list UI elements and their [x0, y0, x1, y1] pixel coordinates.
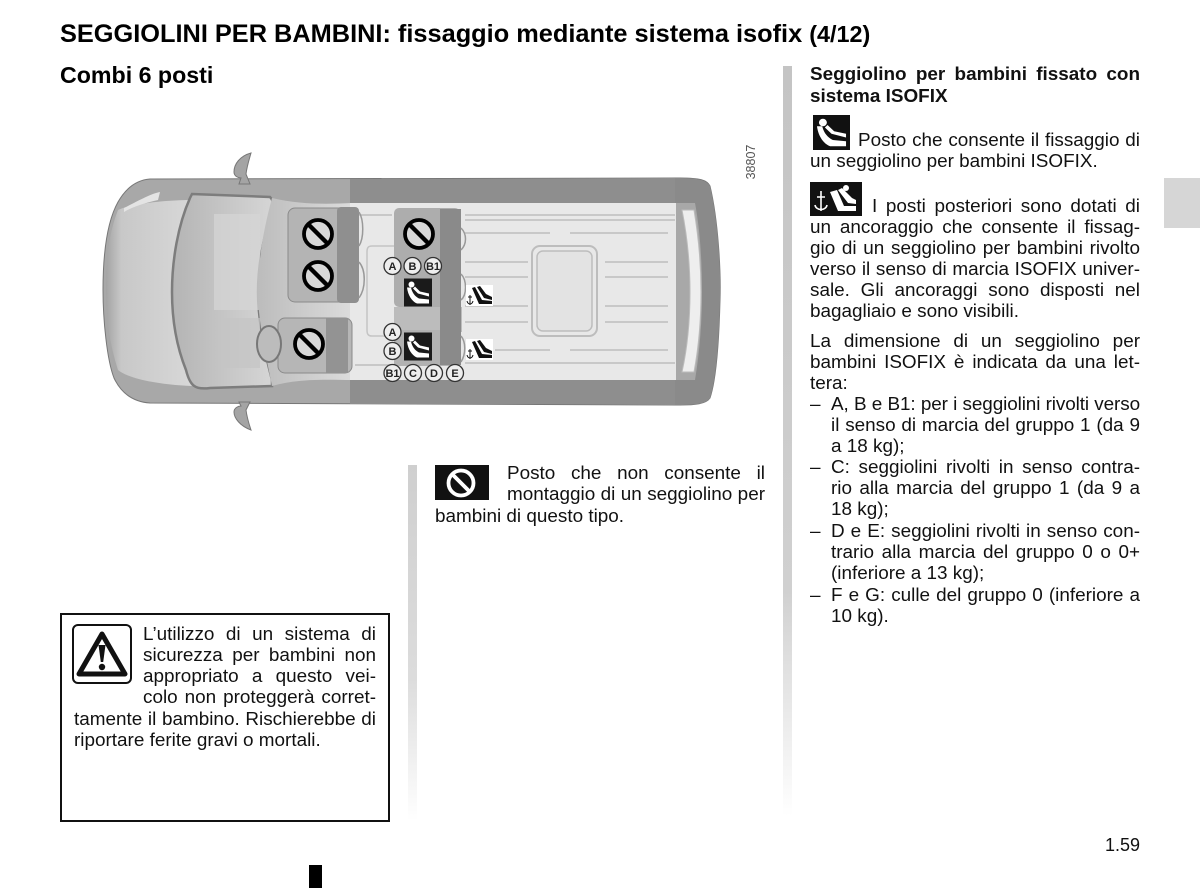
warning text: riportare ferite gravi o mortali. — [74, 730, 321, 751]
anchor icon lower — [466, 339, 493, 360]
size letters: B — [409, 261, 417, 273]
anchor icon upper — [466, 285, 493, 306]
size paragraph: tera: — [810, 373, 848, 394]
heading: isofix — [810, 64, 1140, 107]
note text: bambini di questo tipo. — [435, 506, 624, 527]
cargo area — [350, 203, 676, 380]
warning text — [74, 624, 376, 751]
size list: il senso di marcia del gruppo 1 (da 9 — [831, 415, 1140, 436]
crop mark — [309, 865, 322, 888]
anchors paragraph: bagagliaio e sono visibili. — [810, 301, 1019, 322]
size list: D e E: seggiolini rivolti in senso con- — [831, 521, 1140, 542]
anchors paragraph: gio di un seggiolino per bambini rivolto — [810, 238, 1140, 259]
vertical bar: middle column — [408, 465, 417, 821]
isofix seat icon lower — [404, 332, 432, 360]
size list: – — [810, 394, 821, 415]
anchors paragraph: sale. Gli ancoraggi sono disposti nel — [810, 280, 1140, 301]
subheading: Combi 6 posti — [60, 62, 213, 88]
warning text: sicurezza per bambini non — [143, 645, 376, 666]
van body — [103, 178, 720, 405]
icon: warning triangle — [72, 624, 132, 684]
mirror top — [234, 153, 251, 184]
size list: 18 kg); — [831, 499, 889, 520]
heading: isofix: sistema ISOFIX — [810, 86, 948, 107]
heading: isofix: Seggiolino per bambini fissato con — [810, 64, 1140, 85]
cargo floor ribs — [355, 215, 675, 365]
rear seats — [394, 208, 466, 366]
mirror bottom — [234, 402, 251, 430]
size list: – — [810, 457, 821, 478]
section tab — [1164, 178, 1200, 228]
cab floor — [258, 198, 352, 386]
diagram: van top view with seats — [102, 152, 721, 431]
size paragraph — [810, 331, 1140, 394]
warning text: L’utilizzo di un sistema di — [143, 624, 376, 645]
size list — [810, 394, 1140, 627]
prohibited sign driver — [295, 330, 323, 358]
warning text: colo non proteggerà corret- — [143, 687, 376, 708]
prohibited sign rear — [405, 220, 433, 248]
size list: trario alla marcia del gruppo 0 o 0+ — [831, 542, 1140, 563]
size list: F e G: culle del gruppo 0 (inferiore a — [831, 585, 1140, 606]
roof bands — [350, 179, 676, 203]
size paragraph: bambini ISOFIX è indicata da una let- — [810, 352, 1140, 373]
note text: montaggio di un seggiolino per — [507, 484, 765, 505]
anchors paragraph: verso il senso di marcia ISOFIX univer- — [810, 259, 1140, 280]
prohibited seat note — [435, 463, 765, 527]
title: SEGGIOLINI PER BAMBINI: fissaggio mediante sistema isofix (4/12) — [60, 20, 870, 48]
icon: isofix seat — [813, 115, 850, 150]
note text — [435, 463, 765, 527]
size letters: A — [389, 261, 397, 273]
anchors paragraph: un ancoraggio che consente il fissag- — [810, 217, 1140, 238]
isofix paragraph: Posto che consente il fissaggio di — [858, 130, 1140, 151]
size list: a 18 kg); — [831, 436, 905, 457]
size letters: B1 — [426, 261, 440, 273]
size list: (inferiore a 13 kg); — [831, 563, 984, 584]
size paragraph: La dimensione di un seggiolino per — [810, 331, 1140, 352]
size letters: B — [389, 346, 397, 358]
page number: 1.59 — [1105, 835, 1140, 855]
isofix paragraph — [810, 130, 1140, 172]
anchors paragraph: I posti posteriori sono dotati di — [872, 196, 1140, 217]
icon: anchor seat — [810, 182, 862, 216]
warning text: appropriato a questo vei- — [143, 666, 376, 687]
windshield and cab — [172, 194, 273, 388]
figure reference number: 38807 — [744, 145, 758, 179]
prohibited sign front middle — [304, 262, 332, 290]
size letters: D — [430, 368, 438, 380]
size list: rio alla marcia del gruppo 1 (da 9 a — [831, 478, 1140, 499]
size list: C: seggiolini rivolti in senso contra- — [831, 457, 1140, 478]
hood — [106, 200, 192, 386]
warning box — [60, 613, 390, 822]
driver seat — [257, 318, 352, 373]
size letters: E — [451, 368, 459, 380]
prohibited sign front right — [304, 220, 332, 248]
right column text — [810, 64, 1140, 627]
size letters — [384, 258, 464, 382]
size list: – — [810, 521, 821, 542]
warning text: tamente il bambino. Rischierebbe di — [74, 709, 376, 730]
size list: 10 kg). — [831, 606, 889, 627]
size letters: A — [389, 327, 397, 339]
front seats bench — [288, 207, 364, 303]
anchors paragraph — [810, 196, 1140, 322]
isofix paragraph: un seggiolino per bambini ISOFIX. — [810, 151, 1098, 172]
vertical bar: right column — [783, 66, 792, 816]
size letters: B1 — [385, 368, 400, 380]
note text: Posto che non consente il — [507, 463, 765, 484]
icon: prohibited — [435, 465, 489, 500]
size list: – — [810, 585, 821, 606]
size letters: C — [409, 368, 417, 380]
isofix seat icon upper — [404, 278, 432, 306]
size list: A, B e B1: per i seggiolini rivolti verso — [831, 394, 1140, 415]
